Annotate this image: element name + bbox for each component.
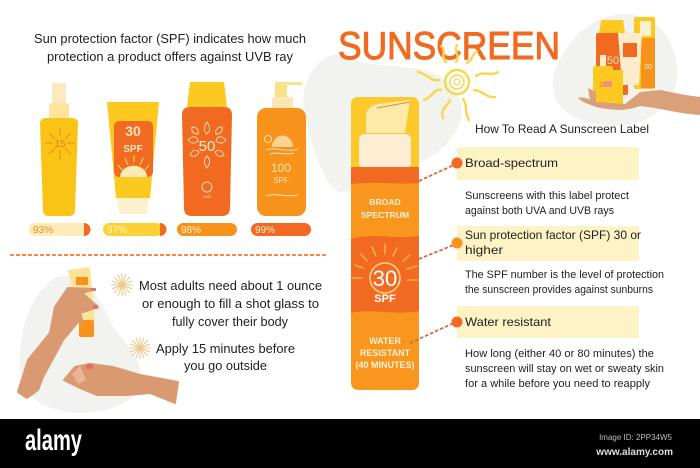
footer bar [0,419,700,468]
heading: how to read a label: How To Read A Sunscreen Label [475,123,649,136]
bottle label: broad spectrum [361,197,409,220]
text: amount of sunscreen: or enough to fill a shot glass to [142,296,319,311]
bottle label: water resistant [355,336,415,370]
bottle label: SPF 30 [373,266,397,305]
product group held in hand: 20 [644,64,652,71]
text: when to apply: you go outside [184,358,267,373]
progress bar: 99% [251,223,311,236]
footer image id: Image ID: 2PP34W5 [599,433,673,442]
progress bar: 93% [29,223,91,236]
text: broad spectrum description: Sunscreens with this label protect [465,190,629,202]
illustration: hands applying sunscreen [18,267,178,403]
text: broad spectrum description [465,190,629,217]
label row: broad spectrum: Broad-spectrum [465,156,558,170]
product: pump bottle SPF 100 [257,82,306,216]
product: pump bottle SPF 100: 100 [271,161,291,175]
icon: sun [418,45,498,120]
product group held in hand [578,17,700,115]
connector: water resistant [410,322,456,343]
product: bottle SPF 50: 50 [199,138,215,155]
text: broad spectrum description: against both UVA and UVB rays [465,205,615,217]
product: spray bottle SPF 15: 15 [54,139,66,150]
progress bar: 97% [103,223,166,236]
label row: water resistant: Water resistant [465,315,552,329]
product: bottle SPF 50: UVB [203,194,211,199]
text: SPF description [465,269,664,296]
text: water resistant description: sunscreen will stay on wet or sweaty skin [465,363,664,375]
icon: starburst 1 [111,273,133,296]
progress bar: 97%: 97% [107,225,127,236]
product: tube SPF 30: SPF [123,144,143,155]
label row: water resistant [452,306,639,338]
icon: starburst 2 [129,337,151,359]
text: when to apply: Apply 15 minutes before [156,341,295,356]
heading: SPF explanation [34,31,306,64]
label row: broad spectrum [452,147,639,180]
bottle label: SPF 30: SPF [374,293,396,305]
product: spray bottle SPF 15 [40,83,78,216]
bottle label: broad spectrum: BROAD [369,197,401,207]
product: bottle SPF 50 [182,82,232,216]
text: SPF description: The SPF number is the level of protection [465,269,664,281]
text: water resistant description: for a while before you need to reapply [465,378,651,390]
bottle label: water resistant: WATER [369,336,401,346]
product: tube SPF 30 [107,102,159,214]
text: amount of sunscreen: Most adults need about 1 ounce [139,278,322,293]
bottle label: broad spectrum: SPECTRUM [361,210,409,220]
bottle label: SPF 30: 30 [373,266,397,291]
text: SPF description: the sunscreen provides against sunburns [465,284,654,296]
background blob: left lower [20,276,141,413]
background blob: right [553,14,677,126]
text: when to apply [156,341,295,373]
connector: SPF [419,244,456,259]
bottle label: water resistant: RESISTANT [360,348,411,358]
progress bar: 98% [177,223,237,236]
product: pump bottle SPF 100: SPF [273,176,289,185]
product group held in hand: 50 [607,55,619,67]
background blob: centre [303,54,462,193]
label row: SPF [452,226,641,261]
footer website: www.alamy.com [595,447,673,458]
heading: SPF explanation: Sun protection factor (SPF) indicates how much [34,31,306,46]
connector: broad spectrum [419,164,456,181]
main sunscreen bottle [351,97,419,390]
label row: SPF: higher [465,243,503,257]
text: amount of sunscreen: fully cover their body [172,314,288,329]
text: water resistant description [465,348,664,390]
heading: SPF explanation: protection a product offers against UVB ray [47,49,293,64]
bottle label: water resistant: (40 MINUTES) [355,360,415,370]
title: SUNSCREEN [338,25,560,68]
product group held in hand: 20 [599,82,607,89]
label row: SPF: Sun protection factor (SPF) 30 or [465,228,641,242]
product: tube SPF 30: 30 [125,123,141,139]
text: amount of sunscreen [139,278,322,329]
progress bar: 99%: 99% [255,225,275,236]
progress bar: 93%: 93% [33,225,53,236]
footer logo: alamy [25,424,82,457]
progress bar: 98%: 98% [181,225,201,236]
text: water resistant description: How long (either 40 or 80 minutes) the [465,348,654,360]
